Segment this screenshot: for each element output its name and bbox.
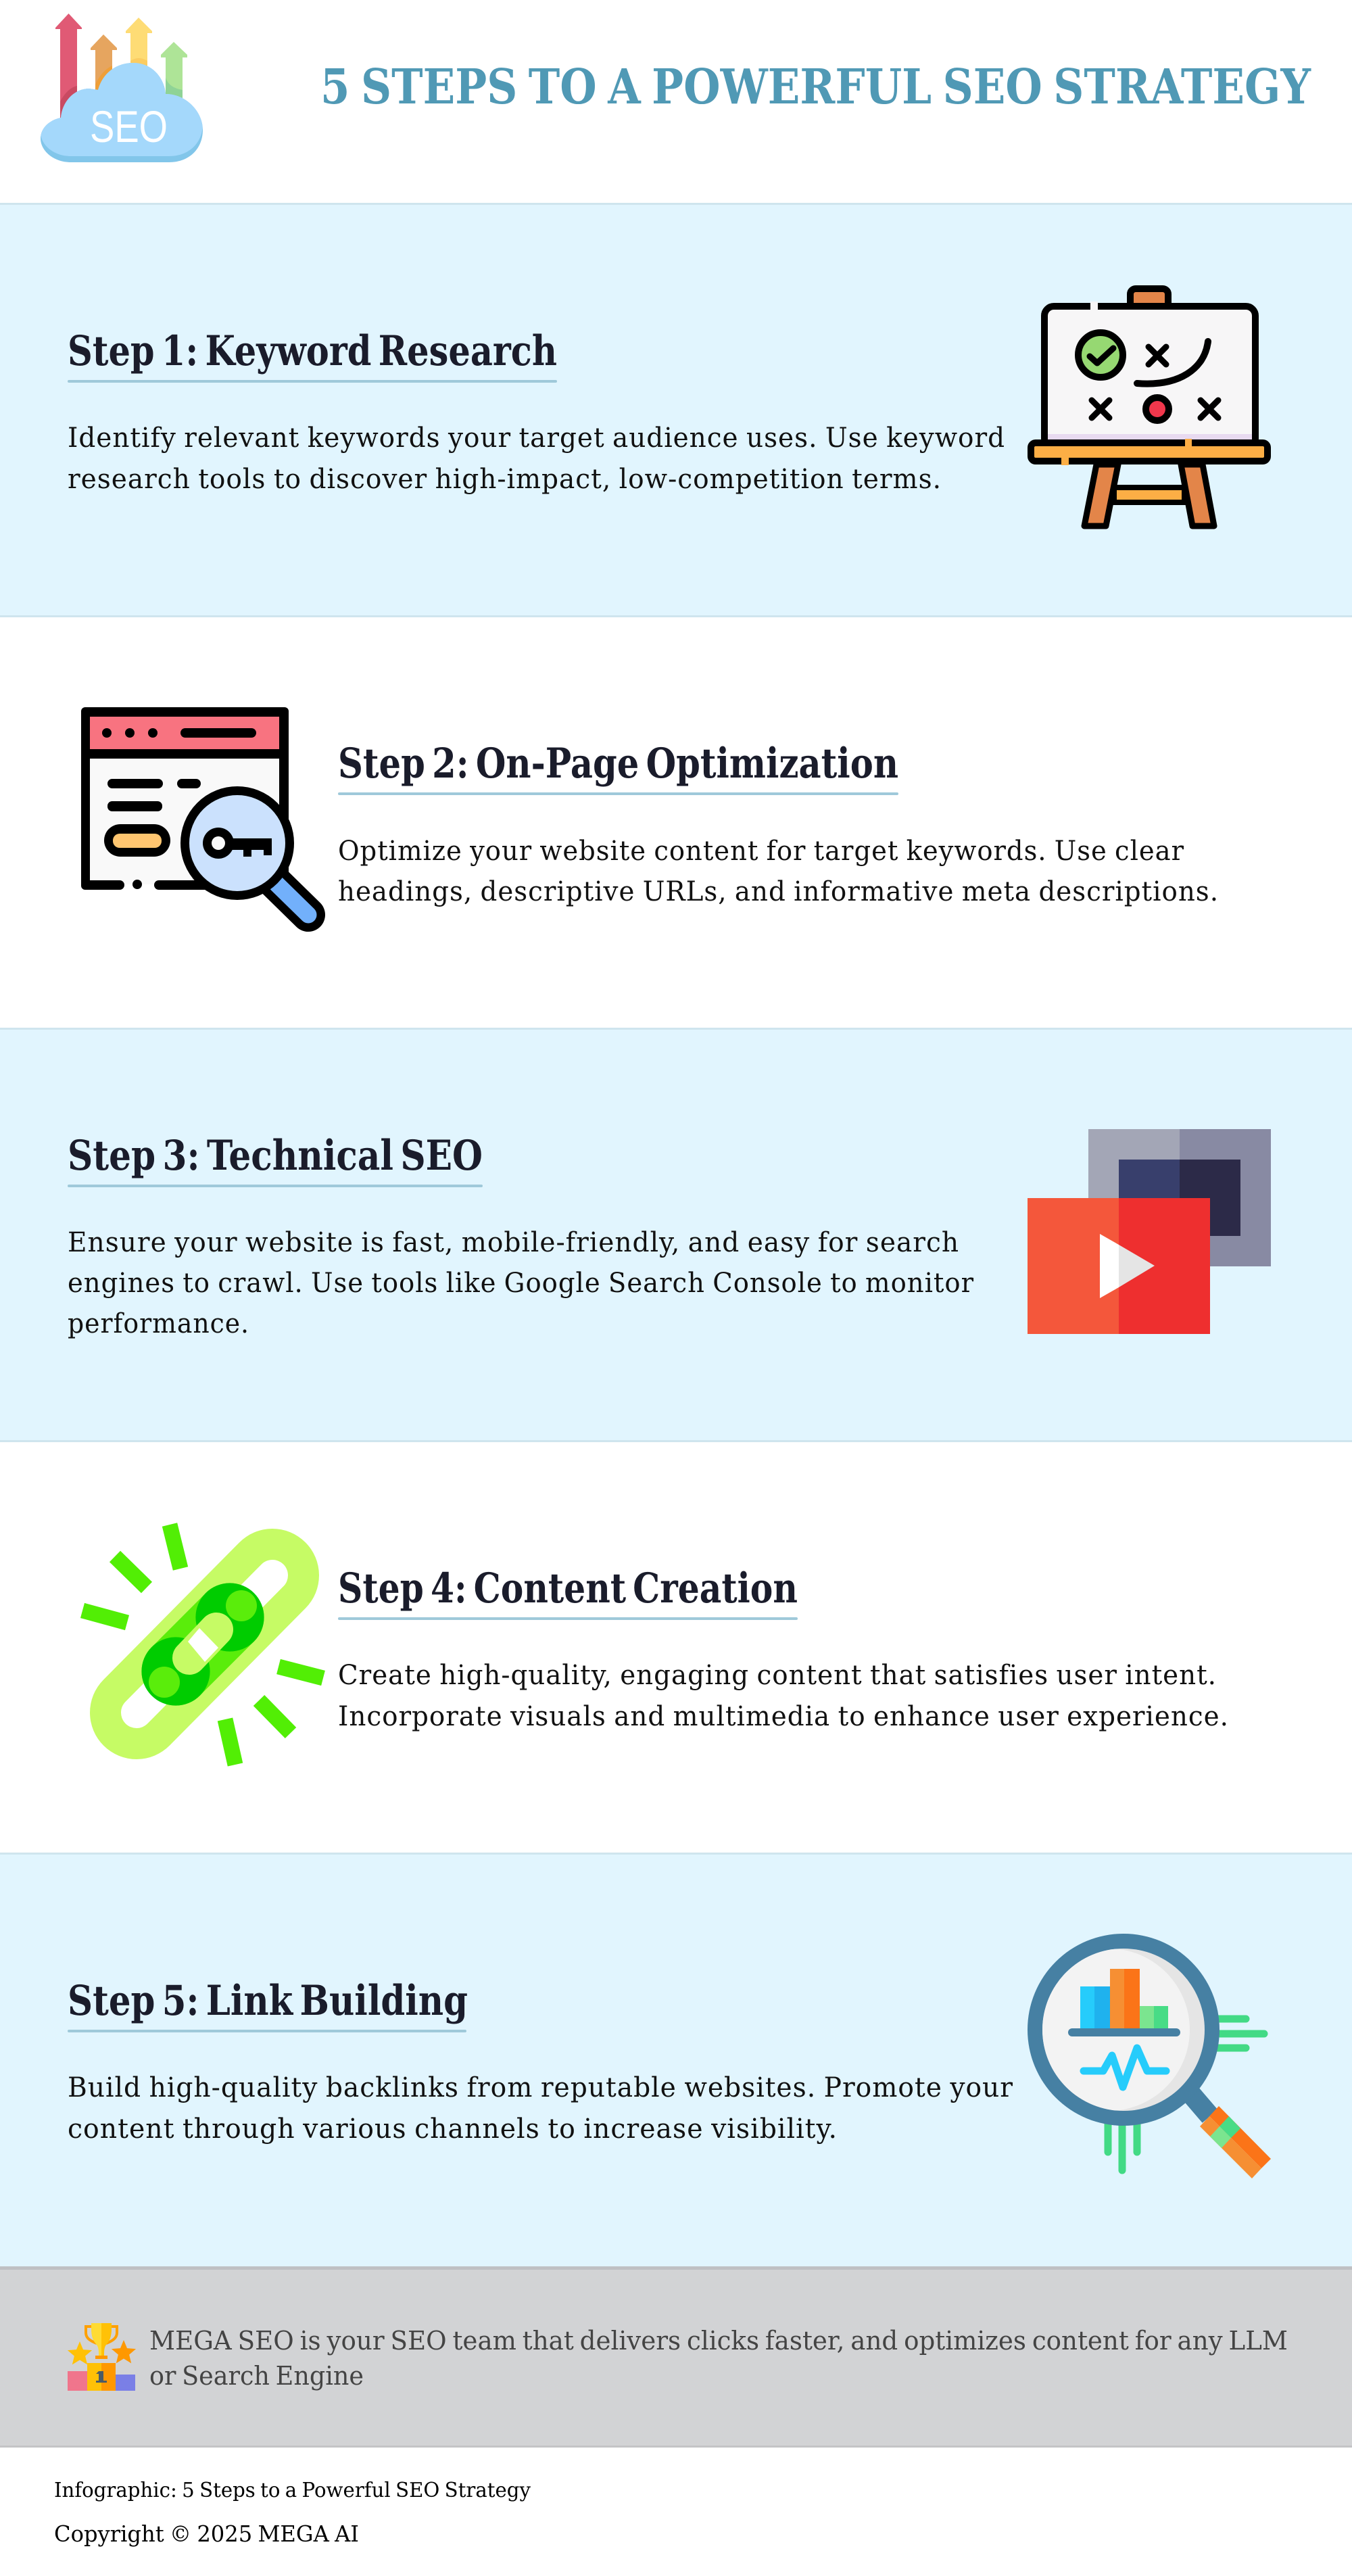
header [41,14,1311,162]
icon: green chain link [82,1525,323,1765]
text: step 3 description: Ensure your website is fast, mobile-friendly, and easy for search [68,1227,959,1258]
text: step 5 description [68,2072,1013,2145]
text: callout message [149,2326,1288,2391]
panel: step 2 on-page optimization [0,615,1352,1029]
text: step 2 description: headings, descriptive URLs, and informative meta descriptions. [338,876,1219,907]
icon: magnifier over bar chart [1028,1934,1271,2178]
icon: video player screens [1028,1129,1271,1334]
heading: step 4: Step 4: Content Creation [338,1565,798,1613]
text: step 1 description: Identify relevant keywords your target audience uses. Use keyword [68,423,1005,454]
heading: step 5: Step 5: Link Building [68,1977,468,2025]
heading: step 2: Step 2: On-Page Optimization [338,740,898,788]
text: step 4 description [338,1660,1229,1732]
text: step 5 description: content through various channels to increase visibility. [68,2114,838,2145]
icon: trophy podium with stars [68,2323,136,2391]
text: step 5 description: Build high-quality backlinks from reputable websites. Promote your [68,2072,1013,2103]
text: step 3 description: engines to crawl. Use tools like Google Search Console to monitor [68,1268,974,1299]
panel: step 3 technical SEO [0,1028,1352,1441]
text: step 3 description: performance. [68,1308,249,1339]
text: step 1 description: research tools to discover high-impact, low-competition terms. [68,464,942,495]
footer: Infographic: 5 Steps to a Powerful SEO Strategy [54,2479,531,2502]
footer: Copyright © 2025 MEGA AI [54,2521,359,2547]
text: step 2 description: Optimize your website content for target keywords. Use clear [338,836,1184,867]
icon: strategy easel board [1031,289,1268,526]
text: step 4 description: Incorporate visuals and multimedia to enhance user experience. [338,1701,1229,1732]
text: step 4 description: Create high-quality, engaging content that satisfies user intent. [338,1660,1217,1691]
panel: step 1 keyword research [0,203,1352,617]
panel: MEGA SEO callout [0,2266,1352,2448]
heading: step 3: Step 3: Technical SEO [68,1132,483,1180]
icon: SEO cloud with arrows [41,14,203,162]
icon: browser window with key magnifier [81,707,308,915]
text: step 1 description [68,423,1005,495]
heading: step 1: Step 1: Keyword Research [68,327,557,375]
text: callout message: or Search Engine [149,2361,364,2391]
footer [54,2479,531,2547]
text: callout message: MEGA SEO is your SEO team that delivers clicks faster, and optimizes content for any LLM [149,2326,1288,2356]
icon: SEO cloud with arrows: SEO [90,101,168,151]
panel: step 5 link building [0,1853,1352,2266]
panel: step 4 content creation [0,1440,1352,1854]
text: step 2 description [338,836,1219,907]
text: step 3 description [68,1227,974,1339]
